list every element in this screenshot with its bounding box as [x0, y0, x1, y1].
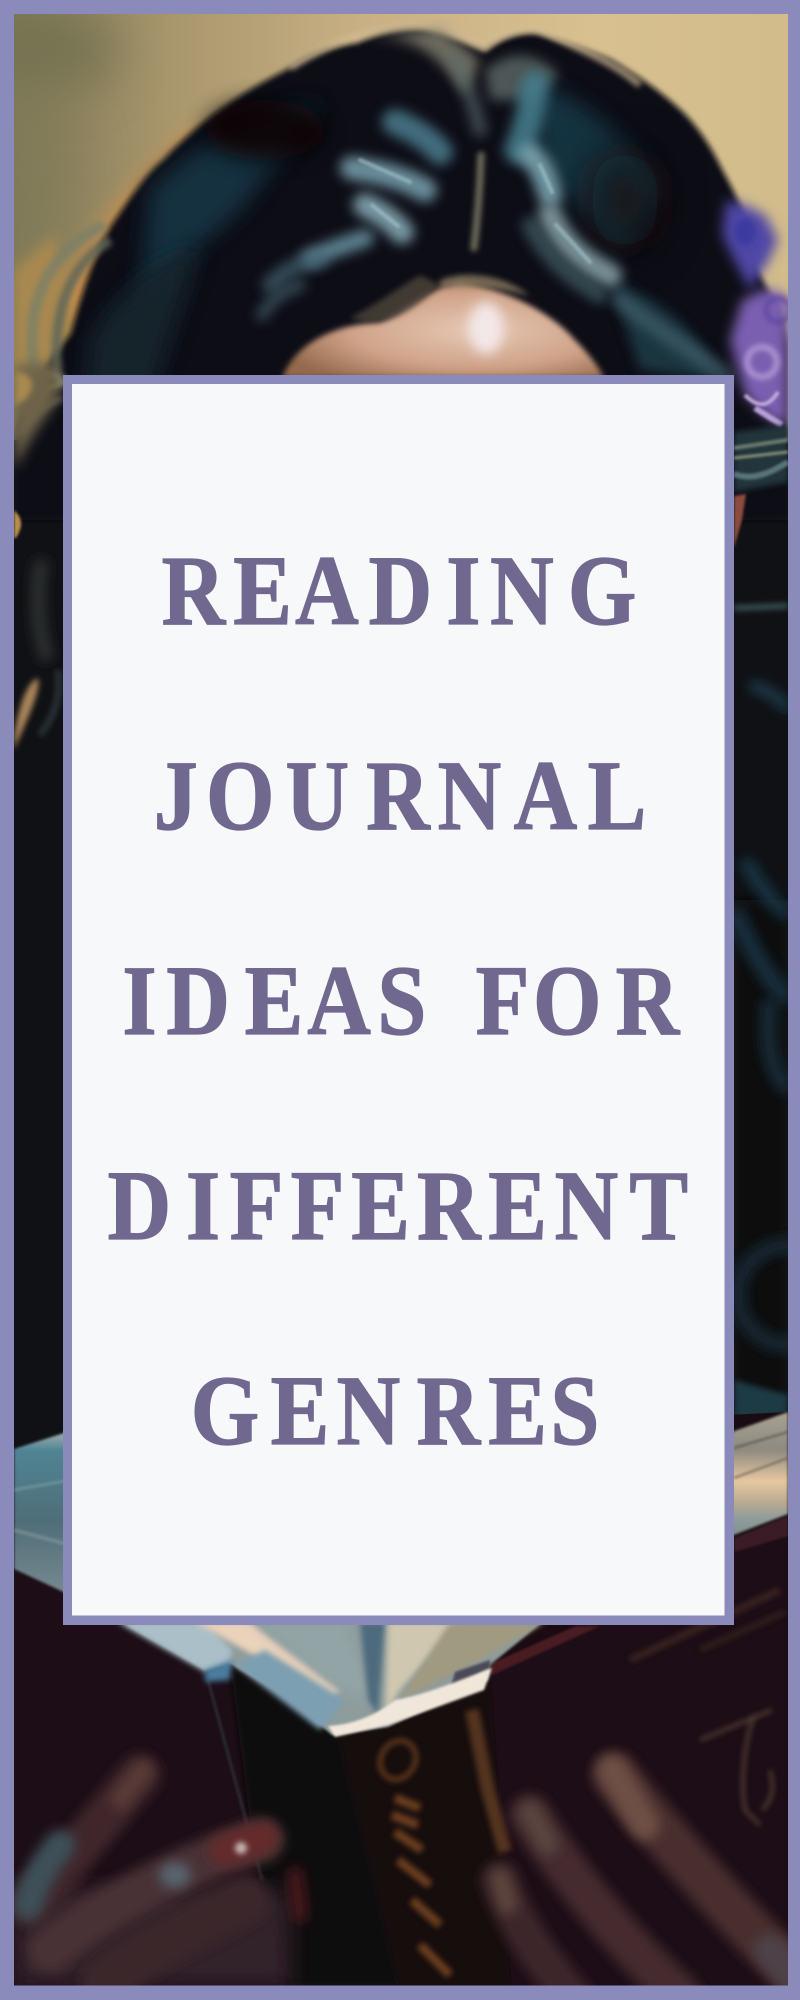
title text: GENRES — [191, 1356, 599, 1466]
right lower hair darkness — [741, 899, 756, 900]
hair parting — [474, 155, 481, 248]
pale flyaway hair at crown — [290, 26, 640, 85]
right hand fingers — [500, 1770, 800, 2000]
hair highlights — [262, 60, 725, 375]
title panel — [63, 375, 734, 1625]
title text: IDEAS FOR — [122, 946, 680, 1056]
title text: JOURNAL — [154, 741, 646, 851]
book pages left and right — [14, 1412, 788, 1595]
title text: READING — [162, 536, 636, 646]
blue sheen left — [140, 105, 320, 300]
title text — [108, 536, 688, 1466]
left hand fingers — [14, 1770, 300, 1986]
purple flowers — [722, 200, 790, 425]
tan painted backdrop — [14, 14, 788, 440]
gold lettering on spine and cover — [373, 1590, 785, 1975]
grey-green strands on left — [32, 225, 105, 370]
panel fill — [72, 384, 724, 1616]
book pages centre — [117, 1620, 545, 1737]
open book: dark covers — [14, 1412, 800, 2000]
title text: DIFFERENT — [108, 1151, 688, 1261]
black hair mass — [14, 26, 788, 1460]
panel border — [63, 375, 734, 1625]
forehead — [282, 275, 604, 378]
left side hair with tan gaps — [14, 362, 60, 750]
deep red-black shadows — [205, 100, 325, 160]
right side hair with ear and blue strands — [734, 422, 788, 1414]
